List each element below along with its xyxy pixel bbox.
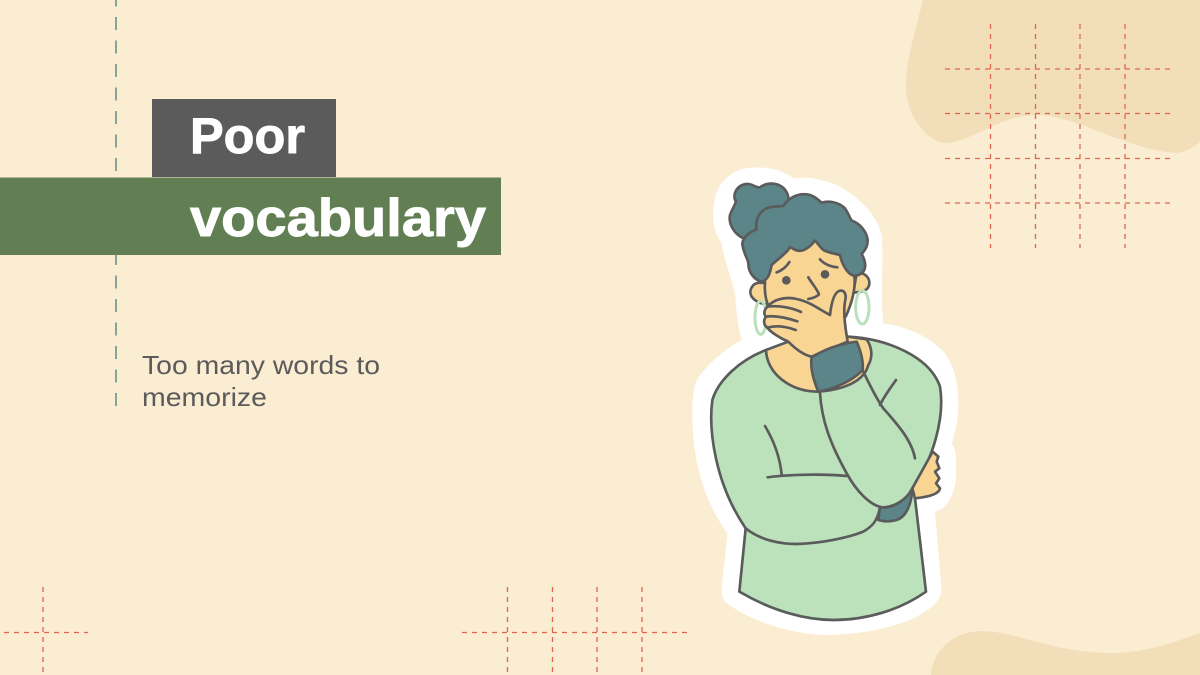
illustration: worried woman sticker	[692, 167, 958, 635]
eyes and brows	[777, 259, 837, 285]
sticker white outline	[692, 167, 958, 635]
sweater	[711, 337, 941, 620]
tucked hand	[912, 452, 940, 498]
face	[765, 241, 855, 357]
cuff near face	[811, 342, 863, 392]
body text	[142, 350, 380, 412]
body text: Too many words to	[142, 350, 380, 380]
earrings	[755, 291, 869, 334]
hand on mouth	[764, 291, 848, 357]
body text: memorize	[142, 382, 267, 412]
heading: vocabulary: vocabulary	[190, 189, 487, 248]
sweater fold lines	[746, 372, 915, 544]
neck and chest	[766, 337, 871, 392]
dashed grid: bottom left	[4, 587, 88, 675]
dashed grid: bottom center	[462, 587, 687, 675]
ears	[750, 273, 869, 305]
blob: bottom right	[931, 631, 1200, 675]
lower cuff	[878, 488, 912, 521]
hair	[742, 194, 868, 282]
hair bun	[730, 184, 789, 238]
heading: Poor	[152, 99, 336, 177]
dashed grid: top right	[945, 24, 1170, 248]
blob: top right	[906, 0, 1200, 153]
nose	[808, 277, 819, 299]
heading: Poor: Poor	[190, 108, 305, 164]
heading: vocabulary	[0, 178, 501, 255]
dashed vertical line	[115, 0, 117, 408]
